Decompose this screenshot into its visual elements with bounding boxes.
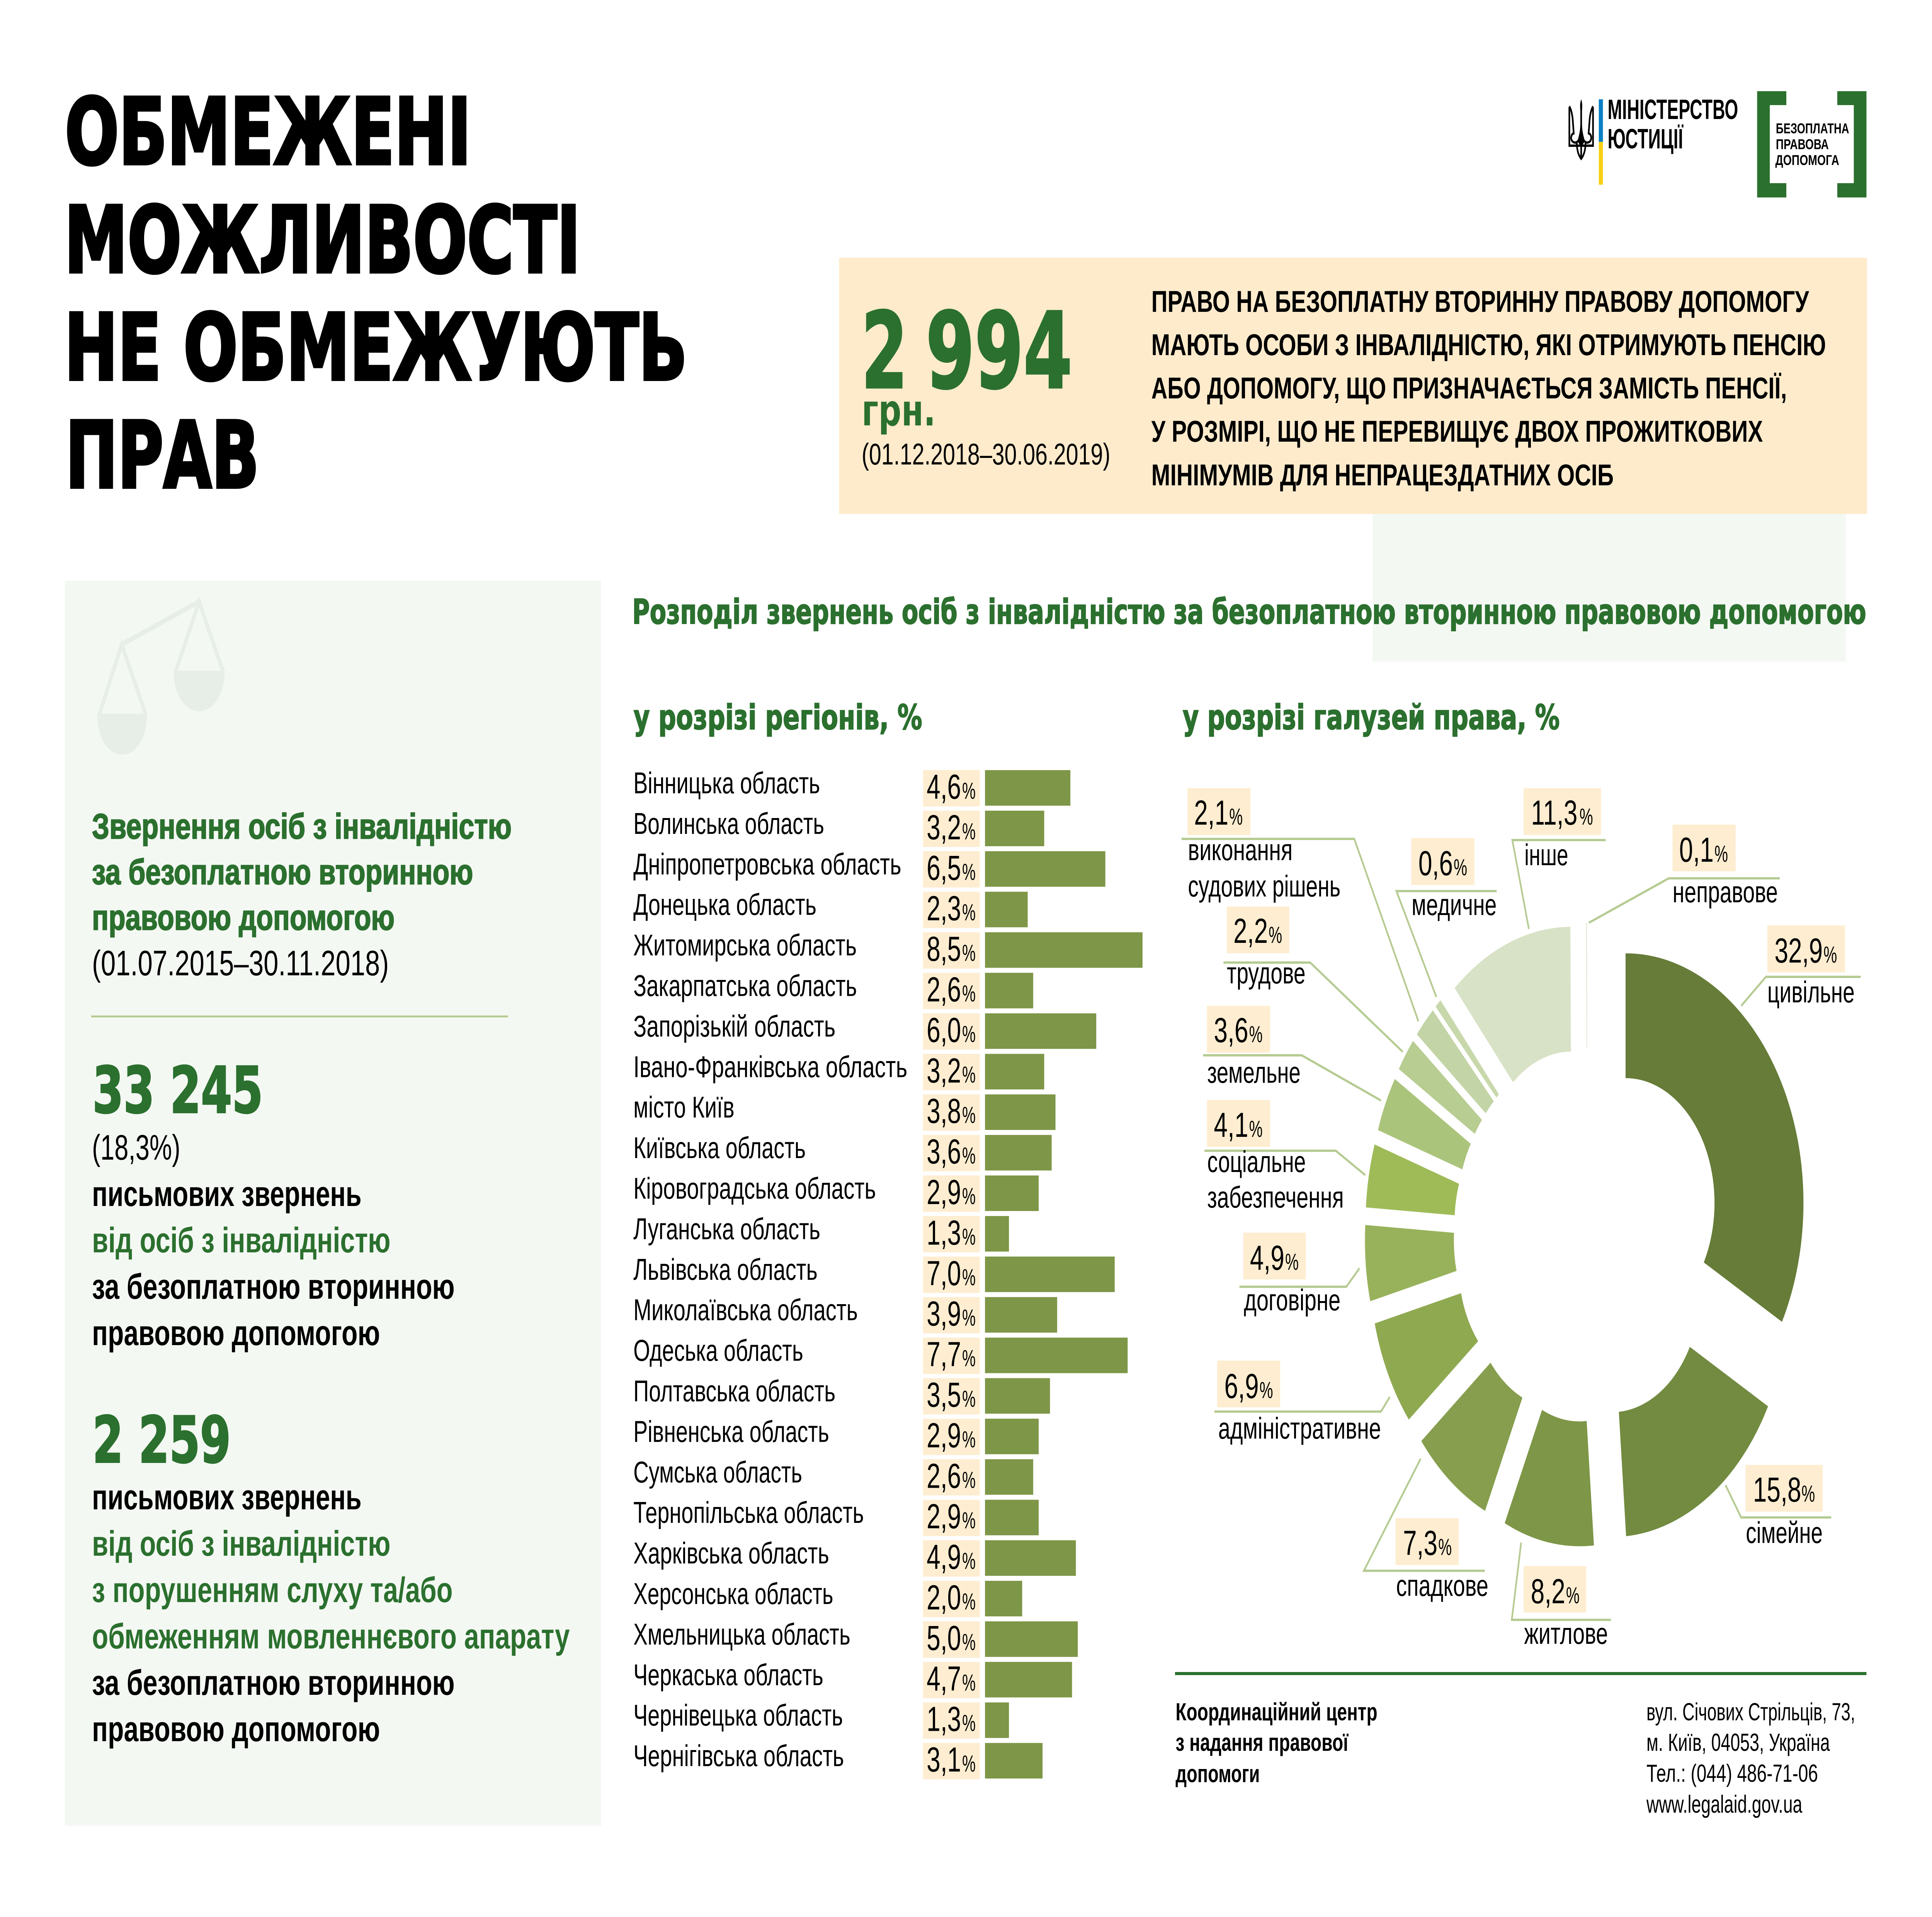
callout: medical 0.6 <box>1396 838 1497 997</box>
callout: non-legal 0.1 <box>1589 825 1780 923</box>
bar chart: regions: % <box>962 1427 976 1453</box>
footer <box>1175 1672 1866 1818</box>
stat: hearing impaired appeals: з порушенням слуху та/або <box>92 1570 453 1610</box>
bar chart: regions: 3,2 <box>927 808 961 847</box>
bar chart: regions: % <box>962 778 976 804</box>
donut chart: fields of law <box>1360 912 1793 1541</box>
callout: administrative 6.9: % <box>1260 1378 1273 1403</box>
bar chart: regions: 3,2 <box>927 1051 961 1090</box>
callout: enforcement 2.1 <box>1182 788 1418 1021</box>
callout: land 3.6: % <box>1249 1022 1263 1048</box>
title: НЕ ОБМЕЖУЮТЬ <box>65 294 687 401</box>
panel heading: Звернення осіб з інвалідністю <box>92 806 512 846</box>
callout: non-legal 0.1: % <box>1714 841 1728 867</box>
bar chart: regions: Волинська область <box>633 807 824 840</box>
panel heading <box>92 806 512 937</box>
bar chart: regions <box>633 767 1143 1779</box>
bar chart: regions: Львівська область <box>633 1253 818 1286</box>
bar chart: regions: Полтавська область <box>633 1374 835 1408</box>
bar chart: regions: % <box>962 1751 976 1777</box>
contacts: вул. Січових Стрільців, 73, <box>1646 1698 1855 1726</box>
big amount: 2 <box>861 290 908 412</box>
bar chart: regions: % <box>962 1224 976 1250</box>
eligibility text: МІНІМУМІВ ДЛЯ НЕПРАЦЕЗДАТНИХ ОСІБ <box>1151 459 1614 492</box>
bar chart: regions: 1,3 <box>927 1699 961 1738</box>
contacts: м. Київ, 04053, Україна <box>1646 1728 1830 1756</box>
bar chart: regions: % <box>962 1508 976 1534</box>
callout: inheritance 7.3: % <box>1438 1534 1452 1560</box>
bar chart: regions: % <box>962 1630 976 1655</box>
bar chart: regions: Чернігівська область <box>633 1739 844 1773</box>
bar chart: regions: % <box>962 1548 976 1574</box>
callout: contract 4.9 <box>1240 1233 1359 1317</box>
bar chart: regions: % <box>962 1143 976 1169</box>
stat: hearing impaired appeals: за безоплатною вторинною <box>92 1663 455 1703</box>
bar chart: regions: 2,6 <box>927 970 961 1009</box>
stat: hearing impaired appeals: від осіб з інвалідністю <box>92 1524 391 1563</box>
callout: medical 0.6: 0,6 <box>1418 844 1453 883</box>
title <box>65 79 687 509</box>
bar chart: regions: % <box>962 1184 976 1209</box>
callout: other 11.3 <box>1512 788 1606 929</box>
stat: written appeals total: правовою допомогою <box>92 1313 380 1353</box>
bar chart: regions: % <box>962 859 976 885</box>
bar chart: regions: Житомирська область <box>633 929 857 962</box>
bar chart: regions: 4,9 <box>927 1537 961 1577</box>
panel: appeals statistics <box>65 581 601 1826</box>
callout: labour 2.2 <box>1223 907 1403 1052</box>
eligibility text <box>1151 285 1826 492</box>
heading: by region: у розрізі регіонів, % <box>634 698 922 738</box>
bar chart: regions: Тернопільська область <box>633 1496 864 1529</box>
logo: Free Legal Aid: ДОПОМОГА <box>1775 152 1839 168</box>
callout: housing 8.2: % <box>1566 1583 1580 1609</box>
bar chart: regions: 7,7 <box>927 1335 961 1374</box>
contacts: Тел.: (044) 486-71-06 <box>1646 1759 1818 1787</box>
callout: civil 32.9 <box>1741 925 1861 1009</box>
callout: social 4.1: 4,1 <box>1214 1105 1248 1145</box>
stat: written appeals total: 33 245 <box>92 1053 263 1128</box>
organisation name: Координаційний центр <box>1175 1698 1378 1726</box>
stat: written appeals total: письмових звернень <box>92 1174 362 1214</box>
callout: enforcement 2.1: 2,1 <box>1194 793 1228 832</box>
callout: medical 0.6: медичне <box>1412 888 1497 922</box>
bar chart: regions: Кіровоградська область <box>633 1172 876 1205</box>
bar chart: regions: Запорізькій область <box>633 1010 835 1043</box>
bar chart: regions: 2,0 <box>927 1578 961 1617</box>
callout: family 15.8 <box>1726 1465 1831 1550</box>
bar chart: regions: Миколаївська область <box>633 1294 858 1327</box>
callout: land 3.6: земельне <box>1207 1056 1301 1089</box>
bar chart: regions: Сумська область <box>633 1456 802 1489</box>
bar chart: regions: Харківська область <box>633 1537 829 1570</box>
callout: contract 4.9: 4,9 <box>1250 1238 1284 1277</box>
bar chart: regions: Івано-Франківська область <box>633 1050 907 1084</box>
callout: enforcement 2.1: виконання <box>1188 833 1293 867</box>
callout: enforcement 2.1: % <box>1229 804 1243 830</box>
bar chart: regions: 8,5 <box>927 929 961 968</box>
bar chart: regions: % <box>962 981 976 1007</box>
callout: social 4.1: забезпечення <box>1207 1181 1344 1214</box>
callout: enforcement 2.1: судових рішень <box>1188 870 1340 903</box>
bar chart: regions: 4,6 <box>927 767 961 806</box>
bar chart: regions: Херсонська область <box>633 1577 833 1611</box>
bar chart: regions: Хмельницька область <box>633 1618 850 1651</box>
callout: family 15.8: сімейне <box>1746 1516 1823 1550</box>
callout: land 3.6: 3,6 <box>1214 1010 1248 1050</box>
callout: medical 0.6: % <box>1454 855 1467 881</box>
stat: hearing impaired appeals <box>92 1403 570 1749</box>
bar chart: regions: 2,9 <box>927 1416 961 1455</box>
bar chart: regions: % <box>962 1265 976 1291</box>
callout: civil 32.9: % <box>1823 942 1837 968</box>
callout: social 4.1: % <box>1249 1116 1263 1142</box>
bar chart: regions: Луганська область <box>633 1213 820 1246</box>
callout: family 15.8: % <box>1801 1481 1815 1507</box>
stat: hearing impaired appeals: обмеженням мовленнєвого апарату <box>92 1616 570 1656</box>
bar chart: regions: Рівненська область <box>633 1415 829 1449</box>
bar chart: regions: 7,0 <box>927 1254 961 1293</box>
bar chart: regions: % <box>962 1589 976 1615</box>
bar chart: regions: 3,5 <box>927 1375 961 1414</box>
panel heading: за безоплатною вторинною <box>92 852 473 892</box>
title: ОБМЕЖЕНІ <box>65 79 471 185</box>
bar chart: regions: 3,6 <box>927 1132 961 1171</box>
title: МОЖЛИВОСТІ <box>65 187 580 294</box>
callout: housing 8.2: житлове <box>1524 1617 1608 1650</box>
stat: hearing impaired appeals: правовою допомогою <box>92 1709 380 1749</box>
heading: by field of law: у розрізі галузей права, % <box>1183 698 1560 738</box>
logo: Ministry of Justice: МІНІСТЕРСТВО <box>1607 94 1738 125</box>
bar chart: regions: 2,9 <box>927 1172 961 1212</box>
callout: land 3.6 <box>1203 1006 1381 1101</box>
logo: Free Legal Aid: БЕЗОПЛАТНА <box>1776 121 1849 136</box>
callout: civil 32.9: 32,9 <box>1774 931 1823 970</box>
bar chart: regions: % <box>962 900 976 926</box>
icon: trident <box>1569 99 1593 159</box>
panel: pale decorative block behind heading <box>1373 514 1846 662</box>
bar chart: regions: 6,0 <box>927 1010 961 1050</box>
callout: contract 4.9: % <box>1285 1249 1299 1275</box>
bar chart: regions: 3,1 <box>927 1740 961 1779</box>
bar chart: regions: % <box>962 1102 976 1128</box>
callout: labour 2.2: трудове <box>1227 957 1306 990</box>
bar chart: regions: % <box>962 1346 976 1371</box>
callout: other 11.3: інше <box>1524 839 1568 872</box>
callout: non-legal 0.1: неправове <box>1673 876 1778 909</box>
eligibility text: АБО ДОПОМОГУ, ЩО ПРИЗНАЧАЄТЬСЯ ЗАМІСТЬ ПЕНСІЇ, <box>1151 372 1787 405</box>
bar chart: regions: Закарпатська область <box>633 969 857 1003</box>
bar chart: regions: % <box>962 1062 976 1088</box>
icon: scales <box>97 602 225 755</box>
stat: hearing impaired appeals: письмових звернень <box>92 1477 362 1517</box>
bar chart: regions: 4,7 <box>927 1659 961 1698</box>
callout: labour 2.2: 2,2 <box>1233 911 1268 951</box>
callout: inheritance 7.3 <box>1364 1459 1488 1602</box>
callout: social 4.1 <box>1204 1100 1365 1214</box>
panel heading: правовою допомогою <box>92 898 395 937</box>
callout: labour 2.2: % <box>1269 922 1282 948</box>
stat: written appeals total <box>92 1053 455 1353</box>
big amount <box>861 290 1072 412</box>
callout: social 4.1: соціальне <box>1207 1145 1306 1179</box>
stat: written appeals total: (18,3%) <box>92 1128 180 1167</box>
callout: contract 4.9: договірне <box>1244 1284 1340 1317</box>
panel: subsistence info box <box>839 258 1867 514</box>
bar chart: regions: 3,8 <box>927 1091 961 1131</box>
bar chart: regions: Донецька область <box>633 888 816 922</box>
big amount: 994 <box>926 290 1072 412</box>
callout: family 15.8: 15,8 <box>1753 1470 1801 1509</box>
callout: administrative 6.9 <box>1214 1361 1390 1445</box>
logo: Free Legal Aid <box>1757 91 1866 197</box>
main heading: Розподіл звернень осіб з інвалідністю за безоплатною вторинною правовою допомогою <box>632 592 1866 632</box>
callout: administrative 6.9: 6,9 <box>1224 1366 1259 1406</box>
callout: administrative 6.9: адміністративне <box>1218 1412 1381 1445</box>
bar chart: regions: % <box>962 1467 976 1493</box>
bar chart: regions: Одеська область <box>633 1334 803 1368</box>
bar chart: regions: % <box>962 819 976 845</box>
bar chart: regions: Вінницька область <box>633 767 820 800</box>
date range: (01.12.2018–30.06.2019) <box>862 438 1110 471</box>
stat: written appeals total: від осіб з інвалідністю <box>92 1220 391 1260</box>
bar chart: regions: Київська область <box>633 1131 806 1165</box>
logo: Ministry of Justice: ЮСТИЦІЇ <box>1607 124 1684 155</box>
logo: Free Legal Aid: ПРАВОВА <box>1776 136 1829 152</box>
callout: inheritance 7.3: спадкове <box>1396 1569 1488 1602</box>
bar chart: regions: 2,6 <box>927 1456 961 1495</box>
period: (01.07.2015–30.11.2018) <box>92 943 389 983</box>
callout: civil 32.9: цивільне <box>1767 976 1855 1009</box>
bar chart: regions: Чернівецька область <box>633 1699 843 1732</box>
eligibility text: ПРАВО НА БЕЗОПЛАТНУ ВТОРИННУ ПРАВОВУ ДОПОМОГУ <box>1151 285 1809 318</box>
callout: inheritance 7.3: 7,3 <box>1403 1523 1437 1563</box>
currency: грн. <box>862 385 936 435</box>
organisation name <box>1175 1698 1378 1788</box>
callout: other 11.3: 11,3 <box>1531 793 1577 832</box>
logo: Ministry of Justice <box>1569 94 1738 185</box>
bar chart: regions: % <box>962 1386 976 1412</box>
callout: housing 8.2 <box>1512 1543 1611 1650</box>
organisation name: з надання правової <box>1175 1728 1349 1756</box>
bar chart: regions: % <box>962 1670 976 1696</box>
organisation name: допомоги <box>1175 1760 1260 1788</box>
callout: housing 8.2: 8,2 <box>1531 1572 1565 1611</box>
bar chart: regions: 5,0 <box>927 1618 961 1657</box>
bar chart: regions: 6,5 <box>927 848 961 887</box>
bar chart: regions: Дніпропетровська область <box>633 848 901 881</box>
bar chart: regions: % <box>962 941 976 966</box>
callout: non-legal 0.1: 0,1 <box>1679 830 1714 869</box>
bar chart: regions: % <box>962 1021 976 1047</box>
stat: hearing impaired appeals: 2 259 <box>92 1403 231 1477</box>
bar chart: regions: місто Київ <box>633 1091 735 1124</box>
bar chart: regions: Черкаська область <box>633 1658 823 1692</box>
contacts: www.legalaid.gov.ua <box>1646 1790 1802 1818</box>
eligibility text: У РОЗМІРІ, ЩО НЕ ПЕРЕВИЩУЄ ДВОХ ПРОЖИТКОВИХ <box>1151 415 1763 448</box>
title: ПРАВ <box>66 402 259 509</box>
bar chart: regions: % <box>962 1305 976 1331</box>
bar chart: regions: 1,3 <box>927 1213 961 1252</box>
bar chart: regions: 2,3 <box>927 889 961 928</box>
eligibility text: МАЮТЬ ОСОБИ З ІНВАЛІДНІСТЮ, ЯКІ ОТРИМУЮТЬ ПЕНСІЮ <box>1151 328 1826 362</box>
bar chart: regions: % <box>962 1711 976 1737</box>
bar chart: regions: 3,9 <box>927 1294 961 1333</box>
callout: other 11.3: % <box>1580 804 1593 830</box>
stat: written appeals total: за безоплатною вторинною <box>92 1267 455 1306</box>
contacts <box>1646 1698 1855 1818</box>
bar chart: regions: 2,9 <box>927 1497 961 1536</box>
